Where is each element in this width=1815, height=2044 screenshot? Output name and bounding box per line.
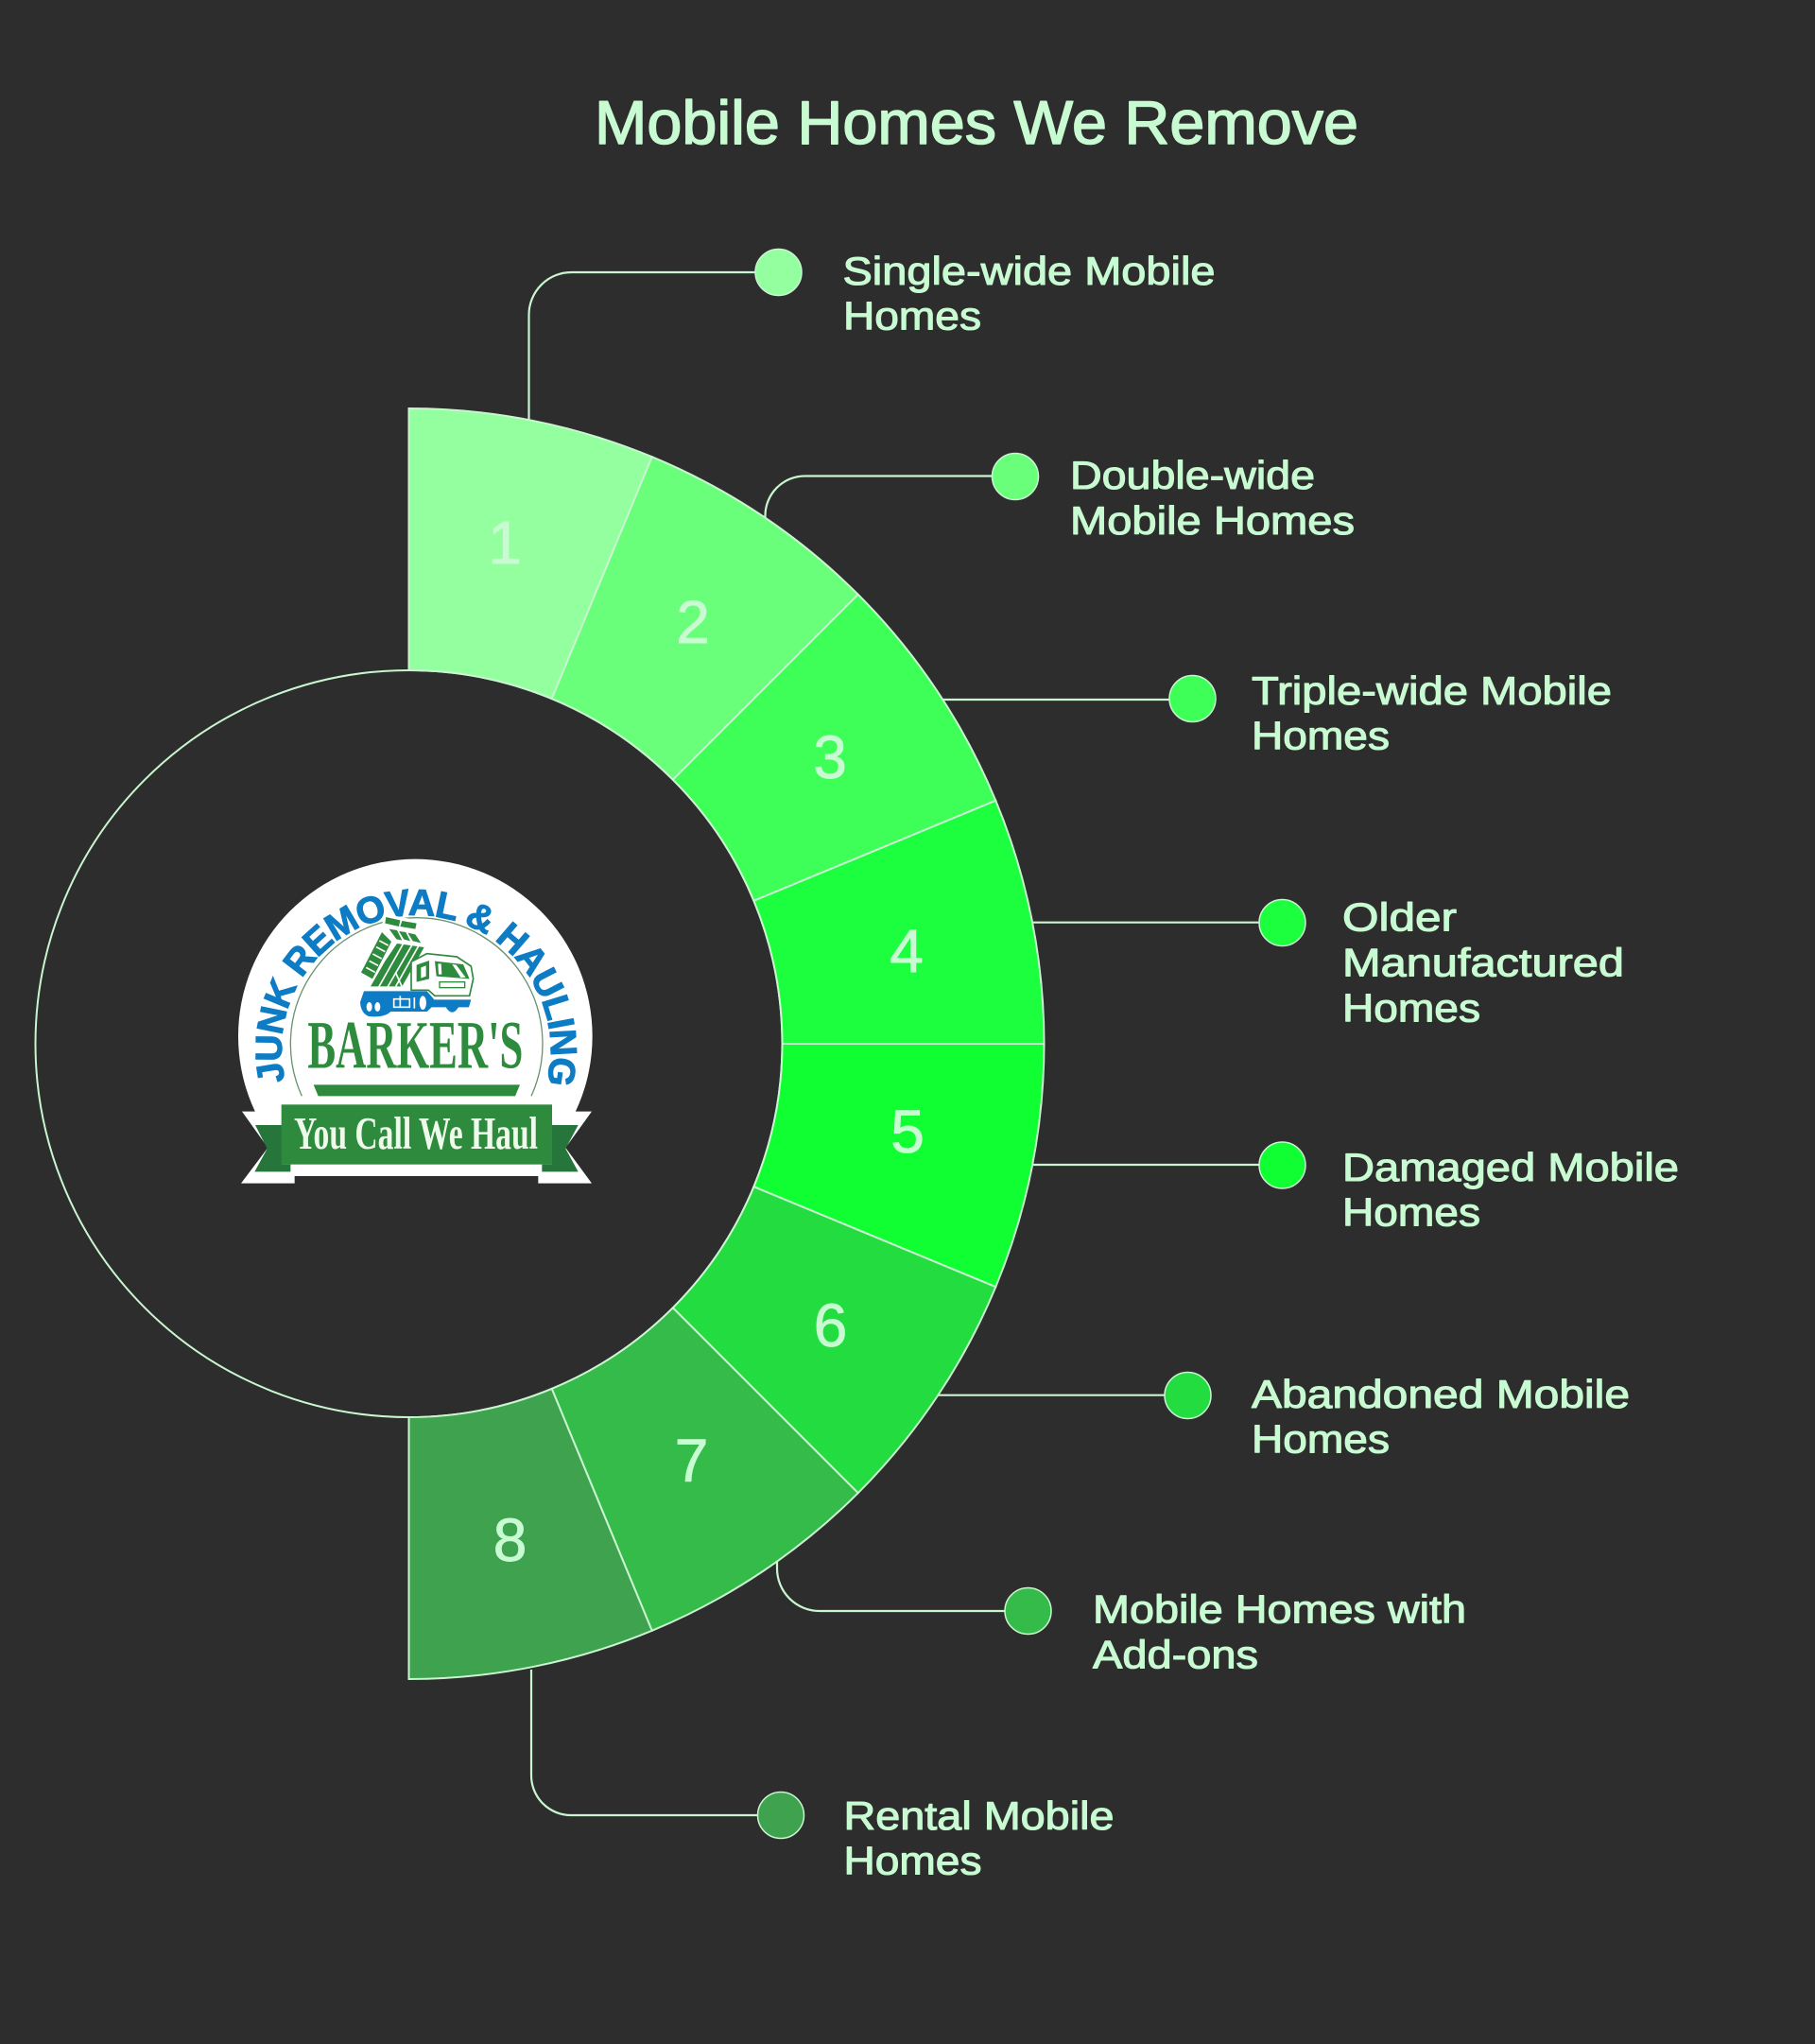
number 1: 1	[488, 509, 522, 577]
number 6: 6	[814, 1291, 847, 1360]
label 1	[843, 249, 1216, 338]
connector 6	[938, 1394, 1166, 1396]
segment 6	[673, 1187, 995, 1493]
segment numbers	[488, 509, 925, 1574]
label 3: Homes	[1252, 713, 1390, 758]
dot 8	[758, 1793, 804, 1838]
segment 8	[408, 1389, 652, 1679]
logo white ribbon backing	[241, 1112, 592, 1184]
logo: Barker's Junk Removal & Hauling	[238, 858, 593, 1184]
semicircle segment chart	[408, 408, 1044, 1679]
number 7: 7	[675, 1427, 708, 1495]
logo ribbon banner	[282, 1104, 552, 1165]
label 1: Homes	[843, 293, 981, 338]
truck bed white backing	[356, 914, 426, 989]
connector 5	[1033, 1164, 1260, 1166]
label 8: Rental Mobile	[843, 1793, 1114, 1838]
number 4: 4	[890, 917, 924, 985]
label 5: Damaged Mobile	[1342, 1145, 1679, 1189]
label 8	[843, 1793, 1114, 1883]
number 2: 2	[676, 588, 710, 656]
truck wheels	[366, 1001, 372, 1013]
number 8: 8	[493, 1506, 527, 1574]
label 7: Mobile Homes with	[1093, 1586, 1466, 1632]
item 1: single-wide	[529, 249, 1216, 420]
dot 3	[1169, 675, 1216, 722]
label 2	[1070, 453, 1355, 543]
item 2: double-wide	[766, 453, 1355, 543]
connector 1	[529, 272, 756, 420]
connector 4	[1033, 922, 1260, 924]
title: Mobile Homes We Remove	[595, 88, 1358, 157]
dot 2	[993, 454, 1038, 499]
logo name BARKER'S: BARKER'S	[307, 1007, 523, 1083]
label 3	[1252, 668, 1612, 758]
label 5	[1342, 1145, 1679, 1235]
label 5: Homes	[1342, 1189, 1480, 1235]
connector 8	[531, 1670, 759, 1815]
label 6: Abandoned Mobile	[1252, 1372, 1630, 1416]
label 7: Add-ons	[1093, 1632, 1258, 1677]
segment 5	[753, 1044, 1044, 1287]
connector 2	[766, 476, 993, 517]
logo tagline: You Call We Haul	[294, 1109, 538, 1159]
logo truck	[356, 914, 474, 1016]
item 7: with add-ons	[777, 1562, 1466, 1677]
number 5: 5	[890, 1098, 925, 1166]
label 8: Homes	[843, 1838, 981, 1883]
dot 1	[755, 250, 802, 295]
label 2: Double-wide	[1070, 453, 1315, 497]
label 1: Single-wide Mobile	[843, 249, 1216, 293]
logo inner arch	[290, 918, 543, 1096]
truck dump bed	[361, 917, 424, 986]
label 6: Homes	[1252, 1416, 1390, 1462]
segment 3	[673, 595, 995, 901]
central circle outline	[36, 670, 783, 1417]
dot 5	[1259, 1142, 1305, 1188]
segment 7	[552, 1308, 858, 1631]
label 4: Older	[1342, 894, 1457, 940]
dot 4	[1259, 900, 1305, 945]
label 6	[1252, 1372, 1630, 1462]
logo curved text: JUNK REMOVAL & HAULING	[255, 889, 578, 1085]
segment 4	[753, 801, 1044, 1044]
truck cab	[411, 954, 474, 996]
truck chassis	[360, 991, 471, 1016]
item 8: rental	[531, 1670, 1114, 1883]
label 7	[1093, 1586, 1466, 1677]
item 3: triple-wide	[942, 668, 1612, 758]
label 4: Manufactured	[1342, 940, 1624, 985]
truck bed slats	[366, 941, 419, 987]
dot 7	[1005, 1588, 1051, 1634]
label 4	[1342, 894, 1624, 1031]
connector 3	[942, 699, 1170, 701]
logo ribbon ends	[254, 1125, 579, 1171]
dot 6	[1165, 1373, 1211, 1418]
connector 7	[777, 1562, 1006, 1611]
item 6: abandoned	[938, 1372, 1630, 1462]
label 2: Mobile Homes	[1070, 498, 1355, 543]
item 4: older manufactured	[1033, 894, 1624, 1031]
item 5: damaged	[1033, 1142, 1679, 1235]
label 3: Triple-wide Mobile	[1252, 668, 1612, 713]
logo green bar	[314, 1084, 520, 1096]
number 3: 3	[813, 723, 847, 791]
segment 2	[552, 457, 858, 780]
segment 1	[408, 408, 652, 699]
label 4: Homes	[1342, 985, 1480, 1031]
logo white badge	[238, 858, 593, 1112]
